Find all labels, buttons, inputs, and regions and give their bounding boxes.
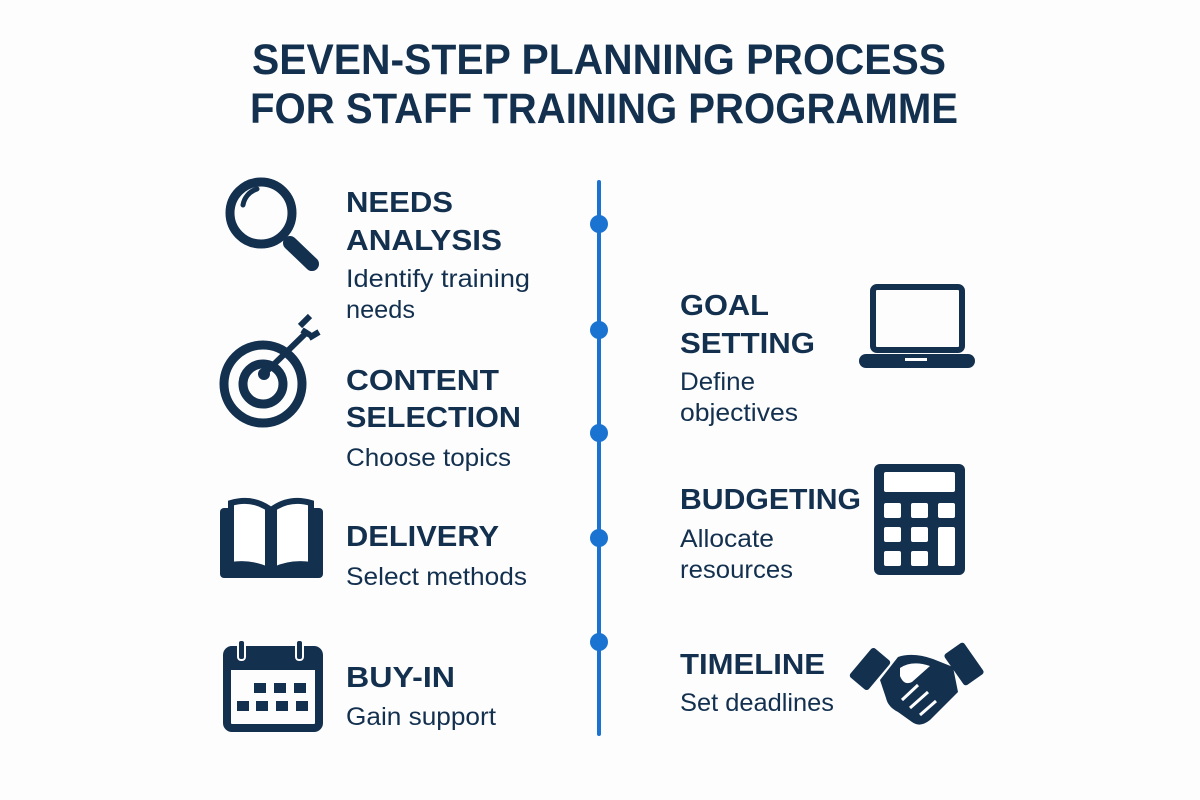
step: buy-in: BUY-IN — [346, 662, 455, 694]
step: content selection: SELECTION — [346, 402, 521, 434]
step: goal setting: SETTING — [680, 328, 815, 360]
icon: magnifier — [230, 182, 312, 264]
step: buy-in: Gain support — [346, 703, 496, 731]
step: needs analysis: NEEDS — [346, 187, 453, 219]
step: timeline: TIMELINE — [680, 649, 825, 681]
step: buy-in — [346, 662, 496, 731]
step: timeline — [680, 649, 834, 717]
step: budgeting: Allocate — [680, 525, 774, 553]
step: goal setting: GOAL — [680, 290, 769, 322]
title: FOR STAFF TRAINING PROGRAMME — [250, 85, 958, 133]
step: budgeting — [680, 484, 861, 584]
title: SEVEN-STEP PLANNING PROCESS — [252, 36, 946, 84]
step: content selection — [346, 365, 521, 472]
icon: calculator — [874, 464, 965, 575]
step: delivery: Select methods — [346, 563, 527, 591]
icon: handshake — [849, 642, 985, 725]
step: delivery: DELIVERY — [346, 521, 499, 553]
step: budgeting: BUDGETING — [680, 484, 861, 516]
step: goal setting: objectives — [680, 399, 798, 427]
step: content selection: Choose topics — [346, 444, 511, 472]
icon: target — [224, 316, 319, 423]
icon: laptop — [859, 287, 975, 368]
step: goal setting — [680, 290, 815, 427]
step: needs analysis: ANALYSIS — [346, 225, 502, 257]
step: budgeting: resources — [680, 556, 793, 584]
step: needs analysis: Identify training — [346, 265, 530, 293]
title — [250, 36, 958, 133]
step: needs analysis — [346, 187, 530, 324]
icon: calendar — [227, 640, 319, 728]
step: goal setting: Define — [680, 368, 755, 396]
timeline — [590, 180, 608, 736]
step: timeline: Set deadlines — [680, 689, 834, 717]
icon: book — [220, 501, 323, 578]
step: needs analysis: needs — [346, 296, 415, 324]
step: content selection: CONTENT — [346, 365, 499, 397]
step: delivery — [346, 521, 527, 591]
